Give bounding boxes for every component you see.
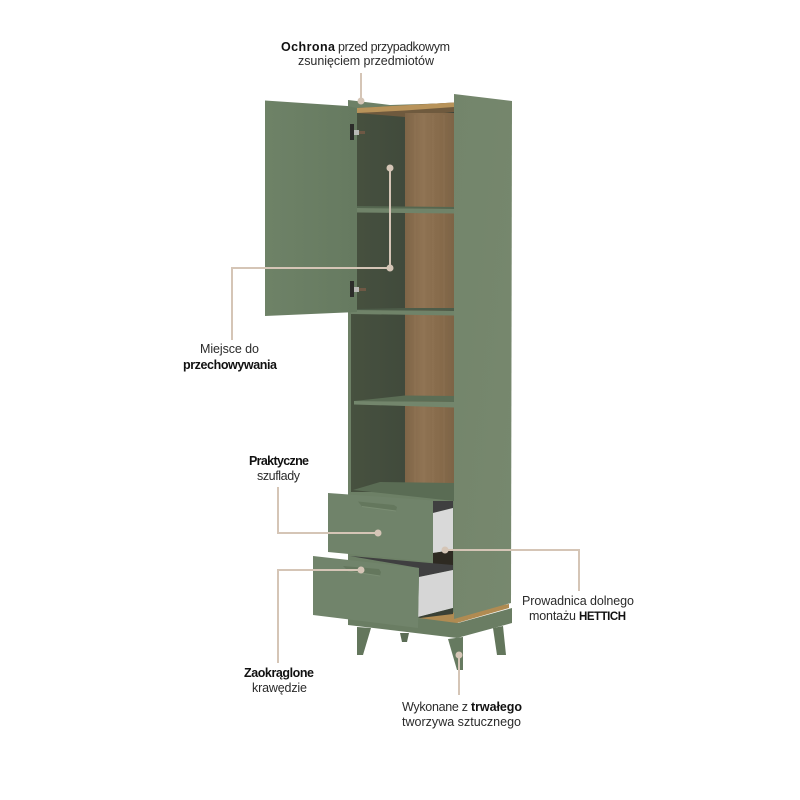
callout: rounded edges: krawędzie <box>252 681 307 695</box>
callout: storage space: przechowywania <box>183 358 278 372</box>
leg: back <box>400 633 409 642</box>
callout: drawers: Praktyczne <box>249 454 309 468</box>
leg: right <box>493 626 506 655</box>
callout: protection: zsunięciem przedmiotów <box>298 54 435 68</box>
callout: material: Wykonane z <box>402 700 468 714</box>
lower drawer handle <box>343 566 381 576</box>
callout: protection <box>281 40 450 104</box>
callout: runners: montażu <box>529 609 576 623</box>
callout: runners: HETTICH <box>579 611 626 623</box>
leg: front <box>448 637 463 670</box>
right side panel <box>454 94 512 619</box>
lower drawer box <box>350 556 453 618</box>
oak top board <box>357 102 454 117</box>
leg: left <box>357 627 371 655</box>
callout: drawers <box>249 454 382 536</box>
lower drawer front <box>313 556 419 628</box>
callout: runners <box>442 546 634 623</box>
wood back panel <box>405 113 454 483</box>
upper drawer box <box>433 501 453 566</box>
callout: protection: Ochrona <box>281 40 336 54</box>
callout: material <box>402 652 522 729</box>
cabinet left side panel <box>348 100 454 625</box>
callout: material: trwałego <box>471 700 522 714</box>
callout: protection: przed przypadkowym <box>338 40 450 54</box>
callout: rounded edges: Zaokrąglone <box>244 666 314 680</box>
callout: runners: Prowadnica dolnego <box>522 594 634 608</box>
door <box>265 100 357 316</box>
hinge: lower <box>350 281 366 297</box>
shelf 4 above drawers <box>353 482 454 501</box>
shelf 3 <box>354 396 454 408</box>
shelf 1 <box>357 206 454 214</box>
callout: drawers: szuflady <box>257 469 301 483</box>
callout: storage space: Miejsce do <box>200 342 259 356</box>
illustration: cabinet with open door and drawers <box>265 94 512 670</box>
callout: material: tworzywa sztucznego <box>402 715 521 729</box>
hinge: upper <box>350 124 365 140</box>
shelf 2 <box>351 308 454 316</box>
upper drawer handle <box>358 502 397 511</box>
interior back, dark left wall <box>351 112 454 492</box>
plinth base <box>348 604 512 638</box>
callout: storage space <box>183 164 394 372</box>
callout: rounded edges <box>244 566 364 695</box>
upper drawer front <box>328 493 433 562</box>
